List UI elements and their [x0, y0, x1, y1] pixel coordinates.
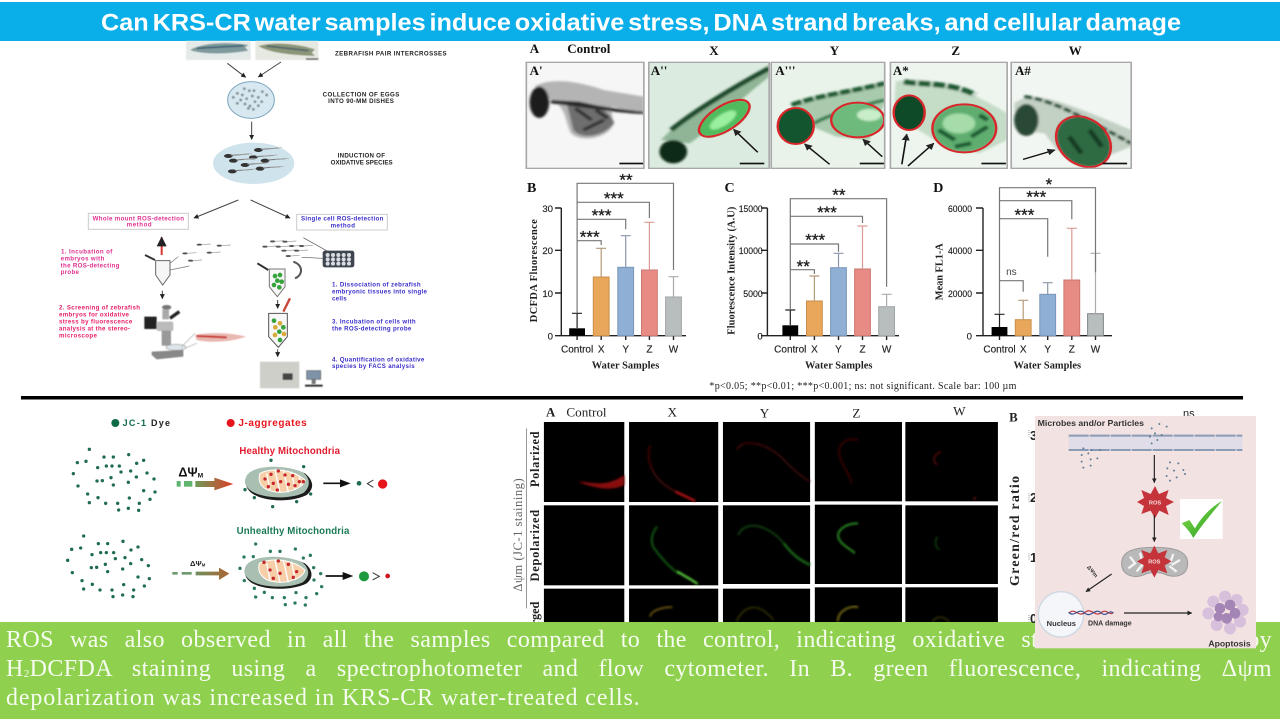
label: collection of eggs: COLLECTION OF EGGS — [323, 92, 399, 99]
y ticks: 30 — [542, 204, 553, 215]
significance brackets — [790, 199, 887, 310]
row: depolarized — [544, 505, 998, 585]
axes — [761, 208, 899, 340]
chart B: DCFDA fluorescence: B — [527, 181, 536, 196]
label: DNA damage: DNA damage — [1088, 618, 1132, 627]
label: collection of eggs: INTO 90-MM DISHES — [328, 98, 394, 105]
text: single cell step 3: the ROS-detecting probe — [332, 325, 412, 332]
icon: cell membrane — [1069, 436, 1242, 450]
panel frames — [526, 62, 1131, 168]
summary text panel: ROS was also observed in all the samples compared to the control, indicating oxidative stress as evidenced by — [6, 626, 1272, 652]
heading: unhealthy mitochondria: Unhealthy Mitochondria — [237, 526, 350, 537]
x labels: Control — [983, 344, 1016, 356]
text: whole mount step 2: microscope — [59, 332, 98, 339]
label: zebrafish pair intercrosses: ZEBRAFISH PAIR INTERCROSSES — [335, 50, 447, 57]
y ticks: 5000 — [743, 289, 763, 300]
confocal image grid — [544, 422, 998, 625]
chart remnants: ratio axis numbers and ns — [1030, 408, 1195, 626]
x labels: Z — [859, 344, 866, 356]
x labels — [561, 344, 679, 356]
axes — [555, 208, 686, 340]
y ticks: 40000 — [948, 246, 972, 257]
y ticks: 15000 — [739, 204, 763, 215]
headings: X — [668, 405, 678, 420]
icon: FACS machine — [260, 362, 323, 388]
legend: J-aggregates: J-aggregates — [238, 418, 307, 429]
summary text panel: H2DCFDA staining using a spectrophotometer and flow cytometer. In B. green fluorescence, indicating Δψm — [6, 656, 1272, 682]
icon: nucleus — [1038, 592, 1084, 637]
legend: JC-1 dye: JC-1 Dye — [123, 418, 170, 428]
icon: healthy mitochondrion — [245, 467, 312, 500]
box: whole mount method: Whole mount ROS-detection — [93, 215, 184, 222]
significance stars: ns — [1006, 267, 1017, 278]
column headings — [530, 41, 1082, 58]
label: collection of eggs — [323, 92, 399, 105]
panel tags: A* — [893, 63, 909, 78]
icon: nucleus: Nucleus — [1047, 619, 1076, 628]
micrograph: Z — [890, 62, 1007, 168]
chart C: fluorescence intensity: C — [724, 181, 735, 196]
footnote: significance legend: *p<0.05; **p<0.01; ***p<0.001; ns: not significant. Scale bar: 100 µm — [709, 381, 1017, 392]
icon: egg dish — [228, 82, 274, 118]
heading: healthy mitochondria: Healthy Mitochondria — [239, 446, 341, 457]
error bars — [572, 222, 678, 328]
icon: tube with probe — [269, 298, 290, 347]
arrow: to single cell method — [251, 200, 290, 218]
error bars — [994, 228, 1100, 327]
chart C: fluorescence intensity — [724, 181, 899, 372]
chart B: DCFDA fluorescence — [527, 171, 686, 372]
arrow: ROS to mitochondrion — [1153, 515, 1156, 542]
icon: tube with cells — [257, 263, 285, 297]
chart remnants: ratio axis numbers and ns: 3 — [1030, 428, 1037, 443]
axis label: green/red ratio: Green/red ratio — [1007, 476, 1023, 586]
x labels — [983, 344, 1101, 356]
bars — [782, 268, 894, 336]
x axis title: Water Samples — [592, 360, 659, 372]
divider — [21, 396, 1243, 400]
text: whole mount step 1: probe — [61, 269, 80, 276]
text: single cell step 1: cells — [332, 295, 347, 302]
headings: B — [1009, 410, 1018, 424]
text: whole mount step 1: embryos with — [61, 255, 105, 262]
label: induction of oxidative species: OXIDATIVE SPECIES — [331, 160, 393, 167]
text: whole mount step 1: 1. Incubation of — [61, 248, 113, 255]
x labels: Y — [622, 344, 629, 356]
icon: embryo tube with probe — [145, 237, 231, 285]
significance stars: *** — [604, 189, 624, 208]
icon: zebrafish pair photos — [186, 41, 318, 60]
column headings: Z — [951, 43, 960, 58]
summary text panel — [0, 622, 1280, 719]
column headings: X — [709, 43, 719, 58]
x labels: W — [1091, 344, 1101, 356]
chart D: mean FL1-A: D — [933, 181, 943, 196]
x labels: W — [669, 344, 679, 356]
text: single cell step 1: 1. Dissociation of zebrafish — [332, 282, 421, 289]
column headings: Y — [830, 43, 840, 58]
label: induction of oxidative species — [331, 152, 393, 167]
box: single cell method: method — [331, 222, 355, 229]
dots: dye around unhealthy mitochondrion — [238, 542, 323, 607]
arrow: high membrane potential — [177, 466, 233, 490]
headings: Y — [760, 405, 770, 420]
row labels: Polarized — [528, 431, 542, 487]
chart D: mean FL1-A — [933, 175, 1112, 372]
significance stars: *** — [1014, 206, 1035, 225]
arrow: low membrane potential: ΔΨ — [190, 559, 202, 568]
micrograph: W — [1011, 62, 1131, 175]
label: microbes and/or particles: Microbes and/or Particles — [1038, 418, 1144, 428]
dots: dye distribution, healthy — [72, 448, 157, 512]
result: green greater than red — [326, 571, 390, 581]
bars — [992, 280, 1103, 336]
headings: W — [953, 403, 966, 418]
icon: particles — [1081, 423, 1186, 482]
arrow: mitochondrion to nucleus — [1086, 574, 1112, 592]
icon: dissociation larvae and plate — [262, 238, 354, 278]
headings — [546, 403, 1018, 424]
axis ticks behind overlay — [1027, 430, 1030, 622]
micrograph: X — [649, 62, 769, 168]
y axis title: Mean FL1-A — [934, 243, 946, 300]
y ticks: 0 — [548, 332, 553, 342]
icon: larvae dish — [213, 143, 294, 184]
y ticks — [542, 204, 553, 342]
x labels: X — [598, 344, 605, 356]
arrow: entry to ROS — [1153, 455, 1156, 483]
column headings: Control — [567, 41, 611, 56]
x labels — [774, 344, 892, 356]
icon: unhealthy mitochondrion — [244, 557, 311, 589]
x labels: Y — [1044, 344, 1051, 356]
y axis title: DCFDA Fluorescence — [529, 219, 540, 322]
text: single cell step 4: species by FACS analysis — [332, 363, 415, 370]
x labels: X — [1020, 344, 1027, 356]
column headings: W — [1069, 43, 1082, 58]
title: Can KRS-CR water samples induce oxidative stress, DNA strand breaks, and cellular damage — [101, 10, 1181, 36]
text: single cell step 3: 3. Incubation of cells with — [332, 318, 416, 325]
row labels: Merged — [528, 602, 542, 642]
significance stars — [797, 186, 846, 276]
y ticks: 0 — [757, 332, 763, 342]
headings: Z — [852, 405, 860, 420]
micrograph: control — [526, 62, 644, 168]
arrow: high membrane potential: M — [198, 473, 204, 480]
icon: mitochondrion with ROS: ROS — [1148, 559, 1161, 565]
text: single cell step 1: embryonic tissues into single — [332, 289, 428, 296]
arrow: low membrane potential: M — [202, 563, 206, 568]
significance stars: *** — [592, 206, 612, 225]
icon: apoptotic cell — [1202, 591, 1249, 634]
text: single cell step 1 — [332, 282, 428, 302]
panel: ROS pathway schematic — [1035, 416, 1256, 649]
chart remnants: ratio axis numbers and ns: ns — [1183, 408, 1195, 420]
panel: fluorescence micrographs — [526, 41, 1131, 175]
arrow: high membrane potential: ΔΨ — [178, 466, 198, 480]
significance stars: ** — [619, 171, 633, 190]
x labels: Control — [774, 344, 806, 356]
panel: JC-1 mitochondria schematic — [66, 418, 390, 607]
text: single cell step 3 — [332, 318, 416, 332]
row: merged — [544, 587, 998, 625]
green fluorescence signal — [652, 523, 939, 584]
merged fluorescence signal — [650, 607, 949, 622]
box: single cell method: Single cell ROS-detection — [301, 216, 384, 223]
text: whole mount step 2: stress by fluorescence — [59, 318, 133, 325]
label: apoptosis: Apoptosis — [1208, 640, 1251, 649]
axes — [976, 208, 1112, 340]
box: single cell method — [297, 214, 387, 230]
arrow: DNA damage to apoptosis — [1124, 611, 1192, 615]
panel tags: A' — [530, 63, 543, 78]
chart remnants: ratio axis numbers and ns: 2 — [1030, 490, 1037, 505]
text: whole mount step 1: the ROS-detecting — [61, 262, 120, 269]
significance stars: *** — [1026, 188, 1047, 207]
panel tags — [530, 63, 1031, 78]
y ticks: 10000 — [739, 246, 763, 257]
y axis title: Fluorescence Intensity (A.U) — [726, 207, 738, 335]
x labels: Z — [646, 344, 652, 356]
significance stars — [580, 171, 633, 247]
panel: JC-1 staining micrographs — [511, 403, 1029, 642]
box: whole mount method: method — [127, 222, 152, 229]
row: polarized — [544, 422, 998, 502]
x labels: Control — [561, 344, 593, 356]
panel tags: A'' — [651, 63, 667, 78]
error bars — [785, 226, 892, 325]
icon: green check mark — [1180, 499, 1223, 539]
icon: ROS burst — [1137, 486, 1174, 518]
significance brackets — [577, 183, 674, 313]
summary text panel: depolarization was increased in KRS-CR water-treated cells. — [6, 684, 641, 710]
text: single cell step 4 — [332, 356, 425, 370]
column headings: A — [530, 41, 540, 56]
label: induction of oxidative species: INDUCTION OF — [338, 152, 385, 159]
text: whole mount step 2: embryos for oxidative — [59, 311, 130, 318]
text: whole mount step 1 — [61, 248, 120, 276]
red fluorescence signal — [578, 439, 976, 501]
y ticks: 0 — [967, 332, 972, 342]
text: whole mount step 2 — [59, 304, 140, 339]
significance brackets — [1000, 188, 1096, 314]
box: whole mount method — [88, 213, 188, 229]
chart remnants: ratio axis numbers and ns: 1 — [1030, 550, 1037, 565]
panel tags: A''' — [775, 63, 796, 78]
panel: zebrafish ROS detection flowchart — [59, 41, 447, 388]
row labels — [528, 431, 542, 642]
label: membrane potential: ΔΨm — [1085, 565, 1098, 579]
x axis title: Water Samples — [1014, 360, 1081, 372]
arrow: probe to cytometer — [276, 349, 279, 357]
arrow: low membrane potential — [172, 559, 229, 580]
icon: DNA strand — [1069, 611, 1113, 615]
arrows: fish to dish — [227, 62, 281, 77]
significance stars: *** — [805, 231, 826, 250]
significance stars: * — [1046, 175, 1053, 194]
headings: Control — [566, 405, 607, 420]
x labels: Y — [835, 344, 842, 356]
headings: A — [546, 406, 556, 420]
text: whole mount step 2: analysis at the stereo- — [59, 325, 130, 332]
y ticks — [739, 204, 763, 342]
dots: dye distribution, unhealthy — [66, 534, 151, 598]
bars — [569, 267, 681, 336]
x labels: X — [811, 344, 818, 356]
x axis title: Water Samples — [805, 360, 872, 372]
chart remnants: ratio axis numbers and ns: 0 — [1030, 611, 1037, 626]
significance stars: *** — [580, 228, 600, 247]
x labels: Z — [1069, 344, 1075, 356]
row labels: Depolarized — [528, 510, 542, 581]
icon: stereo microscope — [144, 305, 246, 359]
result: green less than red — [323, 479, 387, 489]
arrow: cells to probe — [276, 300, 279, 308]
title banner — [0, 2, 1280, 41]
text: whole mount step 2: 2. Screening of zebrafish — [59, 304, 140, 311]
x labels: W — [882, 344, 892, 356]
axis label: JC-1 staining: Δψm (JC-1 staining) — [511, 478, 525, 592]
panel tags: A# — [1015, 63, 1031, 78]
arrow: dish to induction — [250, 122, 253, 139]
significance stars: ** — [832, 186, 846, 205]
micrograph images — [526, 62, 1131, 175]
y ticks: 20000 — [948, 289, 972, 300]
y ticks: 20 — [542, 246, 553, 257]
y ticks — [948, 204, 972, 342]
significance stars: *** — [817, 203, 837, 222]
significance stars: ** — [797, 257, 810, 276]
arrow: to whole mount method — [194, 200, 238, 218]
y ticks: 10 — [542, 289, 553, 300]
arrow: tube to microscope — [161, 291, 164, 299]
dots: dye around healthy mitochondrion — [243, 459, 312, 508]
y ticks: 60000 — [948, 204, 972, 215]
icon: mitochondrion with ROS — [1122, 546, 1188, 578]
text: single cell step 4: 4. Quantification of oxidative — [332, 356, 425, 363]
icon: ROS burst: ROS — [1149, 500, 1161, 506]
significance stars — [1006, 175, 1053, 278]
micrograph: Y — [771, 62, 885, 168]
